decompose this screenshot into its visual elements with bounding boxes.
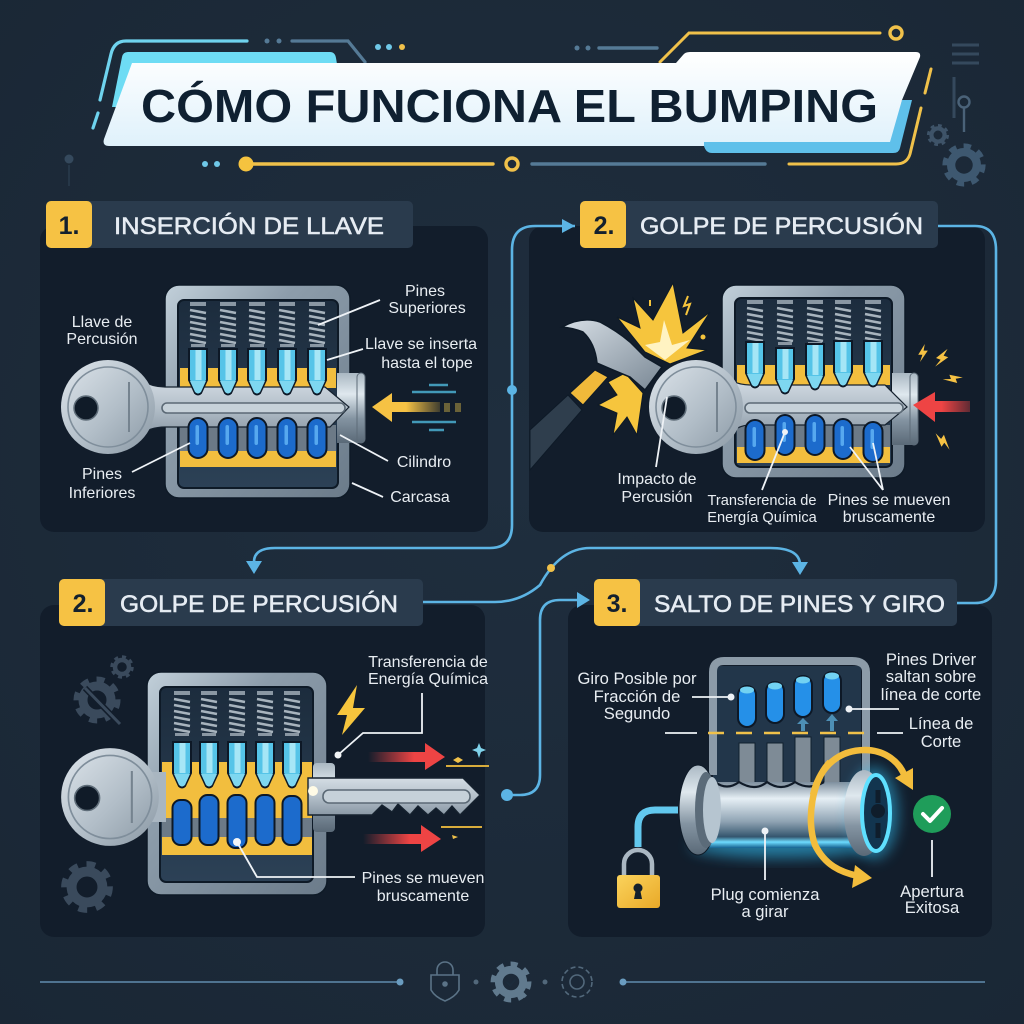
- header 4: 3.: [607, 590, 627, 618]
- decorative node left: [64, 154, 74, 186]
- lock housing: [722, 285, 905, 478]
- flow arrow: step 2 top to step 3: [938, 226, 996, 603]
- labels 3: Energía Química: [368, 671, 488, 688]
- labels 1: Percusión: [66, 331, 138, 348]
- key: [649, 360, 907, 454]
- padlock: [617, 850, 660, 908]
- upper pins: [746, 341, 882, 394]
- lock housing: [165, 285, 350, 498]
- labels 2: [617, 397, 950, 526]
- panel: step 2 bottom: [40, 579, 489, 937]
- header 1: 1.: [59, 212, 79, 240]
- labels 2: bruscamente: [843, 509, 935, 526]
- labels 4: Pines Driver: [886, 650, 977, 669]
- header 3: 2.: [73, 590, 93, 618]
- labels 4: Exitosa: [905, 898, 960, 917]
- springs: [174, 691, 300, 736]
- plug: [679, 765, 870, 858]
- banner dots: [202, 38, 590, 172]
- lower pins: [172, 795, 302, 848]
- yellow zone: [162, 762, 312, 855]
- impact sparks: [598, 283, 710, 435]
- panel: step 1: [40, 201, 488, 532]
- header 2: [580, 201, 938, 248]
- footer gear icon: [494, 965, 528, 999]
- cylinder right: [337, 373, 365, 443]
- footer: [40, 962, 985, 1001]
- labels 3: Pines se mueven: [362, 870, 484, 887]
- labels 4: Corte: [921, 732, 961, 751]
- header 1: INSERCIÓN DE LLAVE: [114, 213, 384, 240]
- yellow shear bands: [180, 368, 336, 467]
- lock diagram 3: [61, 672, 480, 895]
- success check: [913, 795, 951, 833]
- lock housing: [147, 672, 327, 895]
- faint gears: [65, 657, 132, 909]
- header 2: GOLPE DE PERCUSIÓN: [640, 213, 923, 240]
- header 4: [594, 579, 957, 626]
- labels 1: Pines: [405, 283, 445, 300]
- header 3: [59, 579, 423, 626]
- gray band: [162, 818, 312, 837]
- footer outline gear icon: [562, 967, 592, 997]
- upper pins: [189, 349, 326, 394]
- panel 4 background: [568, 605, 992, 937]
- labels 2: Impacto de: [617, 471, 697, 488]
- labels 4: Línea de: [909, 714, 973, 733]
- yellow bands: [737, 365, 890, 463]
- labels 2: Transferencia de: [708, 493, 816, 509]
- rotation arrows: [811, 750, 913, 888]
- banner decorative circuit lines: [93, 27, 931, 170]
- header 3: GOLPE DE PERCUSIÓN: [120, 591, 398, 618]
- cylinder flange: [313, 763, 335, 832]
- labels 3: Transferencia de: [368, 654, 488, 671]
- labels 4: Fracción de: [594, 687, 680, 706]
- upper pins: [173, 742, 301, 788]
- labels 2: Pines se mueven: [828, 492, 950, 509]
- panel: step 2 top: [529, 201, 985, 532]
- inner chamber: [160, 687, 313, 882]
- labels 4: saltan sobre: [886, 667, 976, 686]
- lock diagram 2: [649, 285, 918, 478]
- springs: [747, 300, 881, 345]
- labels 4: Apertura: [900, 882, 965, 901]
- impact arrow: [913, 392, 970, 422]
- cylinder right: [892, 373, 918, 445]
- panel 2 background: [529, 226, 985, 532]
- flow arrow: header 3 to step 3: [423, 548, 808, 602]
- up arrows: [797, 714, 838, 731]
- header 2: 2.: [594, 212, 614, 240]
- labels 2: Energía Química: [707, 510, 818, 526]
- driver pins: [738, 672, 841, 727]
- labels 4: Plug comienza: [711, 885, 820, 904]
- housing open: [713, 661, 866, 790]
- labels 4: Giro Posible por: [578, 669, 697, 688]
- hammer: [530, 320, 662, 470]
- inner chamber: [178, 300, 338, 488]
- lock diagram 1: [61, 285, 365, 498]
- panel: step 3: [568, 579, 992, 937]
- labels 4: [578, 650, 981, 921]
- panel 1 background: [40, 226, 488, 532]
- labels 4: línea de corte: [881, 685, 981, 704]
- labels 1: [66, 283, 477, 506]
- small bolts: [918, 344, 964, 452]
- pipe to padlock: [638, 810, 678, 847]
- gray zone: [737, 425, 890, 447]
- labels 1: Llave se inserta: [365, 336, 477, 353]
- cut line: [708, 732, 870, 734]
- labels 1: Inferiores: [69, 485, 135, 502]
- title text: CÓMO FUNCIONA EL BUMPING: [141, 80, 878, 132]
- inner chamber: [735, 298, 892, 467]
- key: [61, 748, 480, 846]
- plug face: [844, 767, 898, 859]
- labels 1: hasta el tope: [381, 355, 473, 372]
- motion arrows: [363, 743, 489, 852]
- flow arrow: panel 3 to header 4: [501, 592, 590, 801]
- banner cyan and blue corners: [112, 52, 912, 153]
- header 4: SALTO DE PINES Y GIRO: [654, 591, 945, 618]
- labels 1: Llave de: [72, 314, 132, 331]
- footer lock icon: [431, 962, 459, 1001]
- springs: [190, 302, 325, 347]
- labels 1: Superiores: [388, 300, 466, 317]
- key pins: [739, 737, 840, 785]
- labels 3: [233, 654, 488, 905]
- header 1: [46, 201, 413, 248]
- labels 3: bruscamente: [377, 888, 469, 905]
- labels 4: a girar: [741, 902, 789, 921]
- panel 3 background: [40, 605, 485, 937]
- labels 4: Segundo: [604, 704, 670, 723]
- key: [61, 360, 349, 454]
- labels 1: Cilindro: [397, 454, 451, 471]
- title banner: [93, 27, 931, 172]
- decorative gears and sliders top right: [929, 45, 982, 183]
- gray cylinder zone: [180, 425, 336, 451]
- labels 2: Percusión: [621, 489, 693, 506]
- insertion arrow: [372, 385, 461, 430]
- lightning bolt: [337, 685, 365, 735]
- labels 1: Carcasa: [390, 489, 450, 506]
- labels 1: Pines: [82, 466, 122, 483]
- lower pins: [746, 415, 882, 462]
- flow arrow: step 1 to step 2 bottom: [246, 219, 575, 574]
- banner white plate: [104, 52, 920, 146]
- lower pins: [188, 418, 326, 458]
